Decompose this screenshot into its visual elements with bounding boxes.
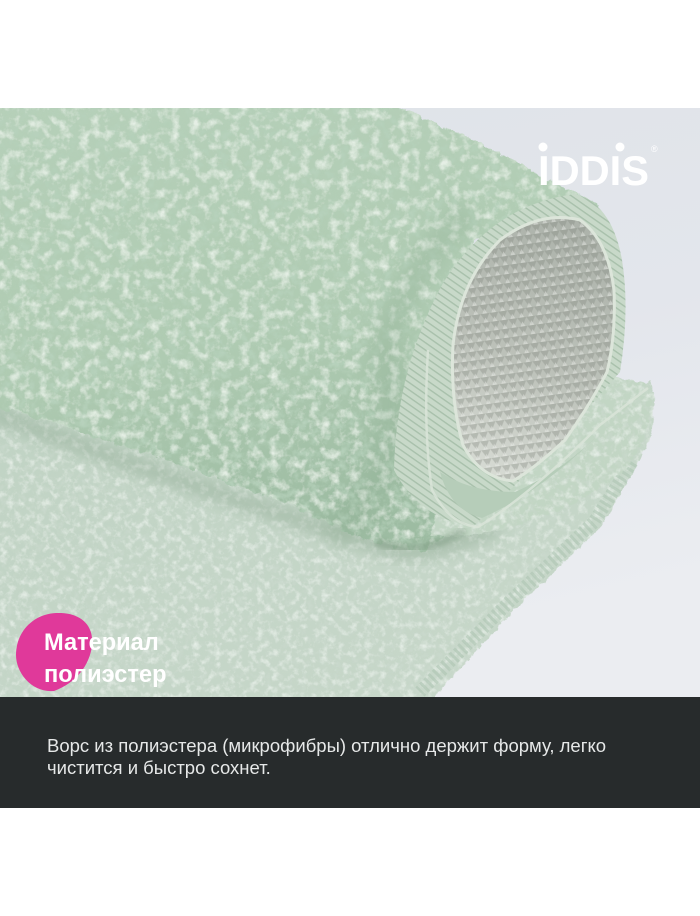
- photo: rolled green bath mat: [0, 108, 700, 697]
- badge text: Материал: [44, 630, 159, 656]
- brand logo: IDDIS: [538, 147, 649, 194]
- shadow in the roll folds: [375, 530, 465, 548]
- dark caption band: [0, 697, 700, 808]
- shadow under the roll: [0, 412, 500, 552]
- seam of the binding: [426, 350, 648, 527]
- flat part of the mat: [0, 380, 654, 704]
- darker tone towards the roll edge: [330, 210, 470, 540]
- pink blob: [16, 613, 92, 692]
- description text: [47, 735, 606, 778]
- roll body: [0, 100, 600, 552]
- fold of mat under the roll end: [430, 377, 651, 536]
- fluffy patch inside the fold: [440, 428, 605, 518]
- binding around roll end: [394, 194, 626, 526]
- textured underside of the roll: [452, 218, 614, 481]
- badge text: [44, 630, 166, 688]
- description text: Ворс из полиэстера (микрофибры) отлично держит форму, легко: [47, 735, 606, 756]
- description text: чистится и быстро сохнет.: [47, 757, 271, 778]
- brand logo: ®: [651, 144, 658, 154]
- background: pale grey surface: [0, 108, 700, 697]
- flap edge stitching: [420, 462, 632, 692]
- badge text: полиэстер: [44, 662, 166, 688]
- badge: material: [16, 613, 166, 692]
